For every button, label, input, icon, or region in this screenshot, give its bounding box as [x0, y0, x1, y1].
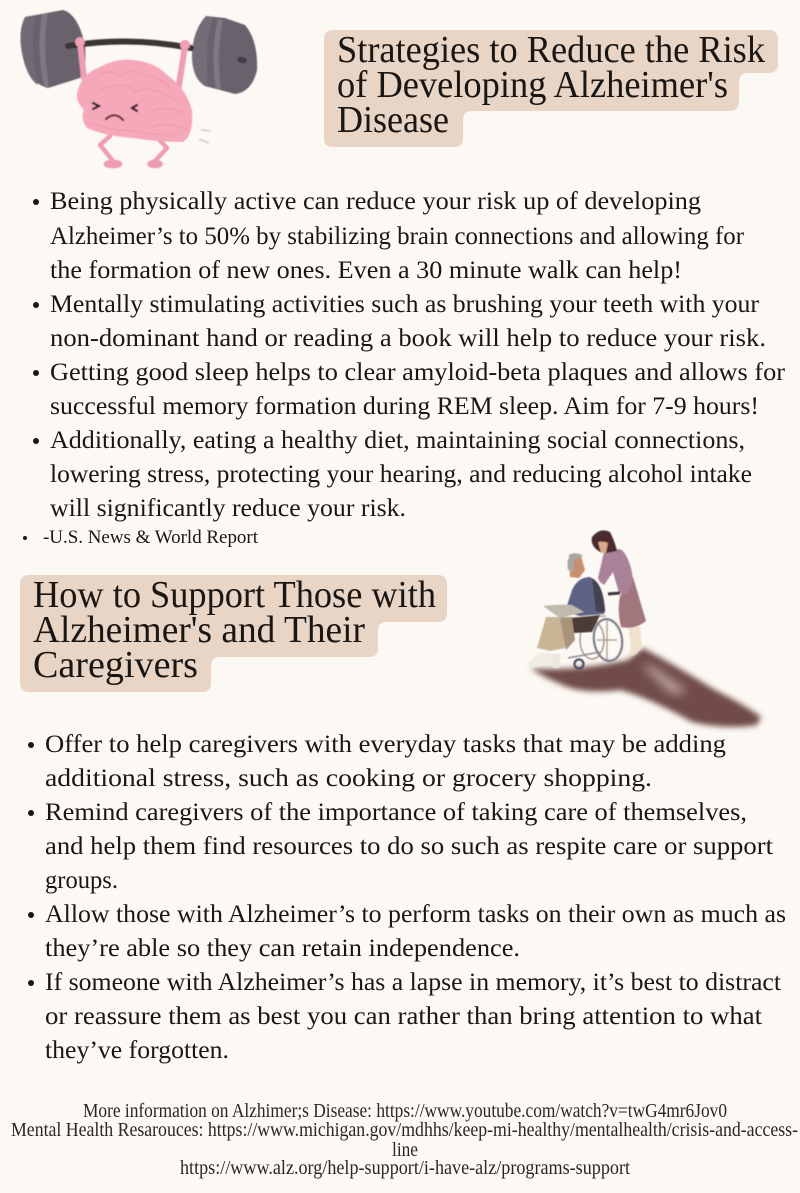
icon: long shadow — [530, 648, 761, 727]
heading: strategies: Strategies to Reduce the Risk — [337, 29, 765, 71]
heading: support: Caregivers — [33, 644, 198, 686]
heading: support: How to Support Those with — [33, 574, 436, 616]
bullet: diet and lifestyle: lowering stress, protecting your hearing, and reducing alcohol intake — [50, 461, 752, 488]
bullet: mental stimulation — [33, 291, 766, 352]
bullet: diet and lifestyle — [33, 427, 752, 522]
icon: left weight plate — [20, 10, 85, 88]
footer: resource links: line — [392, 1139, 418, 1161]
heading background: support — [20, 575, 447, 692]
bullet: self care — [28, 799, 773, 894]
bullet: memory lapses: If someone with Alzheimer’s has a lapse in memory, it’s best to distract — [45, 969, 781, 996]
bullet: everyday tasks: additional stress, such as cooking or grocery shopping. — [45, 765, 652, 792]
bullet: self care: and help them find resources to do so such as respite care or support — [45, 833, 773, 860]
text block: strategies bullets — [33, 188, 786, 522]
bullet: sleep — [33, 359, 786, 420]
bullet: everyday tasks: Offer to help caregivers with everyday tasks that may be adding — [45, 731, 727, 758]
icon: brain lifting barbell — [20, 10, 257, 166]
icon: right weight plate — [192, 16, 257, 94]
bullet: mental stimulation: non-dominant hand or reading a book will help to reduce your risk. — [50, 325, 766, 352]
bullet: diet and lifestyle: Additionally, eating a healthy diet, maintaining social connections, — [50, 427, 745, 454]
bullet: memory lapses — [28, 969, 781, 1064]
heading background: strategies — [324, 30, 778, 147]
bullet: independence: they’re able so they can retain independence. — [45, 935, 520, 962]
icon: caregiver pushing wheelchair — [528, 530, 761, 727]
icon: caregiver woman — [592, 530, 646, 656]
icon: brain body — [77, 60, 192, 142]
bullet: self care: groups. — [45, 867, 118, 894]
bullet: memory lapses: or reassure them as best you can rather than bring attention to what — [45, 1003, 762, 1030]
icon: barbell bar — [68, 41, 191, 48]
footer: resource links — [11, 1100, 798, 1179]
bullet: physical activity — [33, 188, 745, 284]
bullet: diet and lifestyle: will significantly reduce your risk. — [50, 495, 406, 522]
bullet: independence — [28, 901, 786, 962]
bullet: physical activity: the formation of new ones. Even a 30 minute walk can help! — [50, 257, 682, 284]
icon: brain folds — [90, 71, 188, 134]
heading: support: Alzheimer's and Their — [33, 609, 365, 651]
text block: support bullets — [28, 731, 786, 1064]
heading: strategies — [337, 29, 765, 141]
bullet: independence: Allow those with Alzheimer’s to perform tasks on their own as much as — [45, 901, 786, 928]
icon: brain face — [93, 103, 137, 120]
heading: support — [33, 574, 436, 686]
source citation: -U.S. News & World Report — [43, 527, 259, 548]
footer: resource links: https://www.alz.org/help-support/i-have-alz/programs-support — [180, 1157, 630, 1179]
bullet: self care: Remind caregivers of the importance of taking care of themselves, — [45, 799, 747, 826]
icon: wheelchair wheels — [568, 616, 625, 668]
bullet: sleep: Getting good sleep helps to clear amyloid-beta plaques and allows for — [50, 359, 786, 386]
bullet: physical activity: Alzheimer’s to 50% by stabilizing brain connections and allowing for — [50, 223, 745, 250]
icon: motion marks — [199, 130, 211, 143]
icon: brain arms — [76, 38, 189, 98]
bullet: sleep: successful memory formation during REM sleep. Aim for 7-9 hours! — [50, 393, 759, 420]
icon: brain legs and feet — [100, 133, 167, 166]
bullet: mental stimulation: Mentally stimulating activities such as brushing your teeth with your — [50, 291, 760, 318]
bullet: everyday tasks — [28, 731, 727, 792]
heading: strategies: Disease — [337, 99, 449, 141]
icon: man in wheelchair — [528, 553, 605, 668]
bullet: memory lapses: they’ve forgotten. — [45, 1037, 229, 1064]
bullet: physical activity: Being physically active can reduce your risk up of developing — [50, 188, 702, 215]
heading: strategies: of Developing Alzheimer's — [337, 64, 728, 106]
